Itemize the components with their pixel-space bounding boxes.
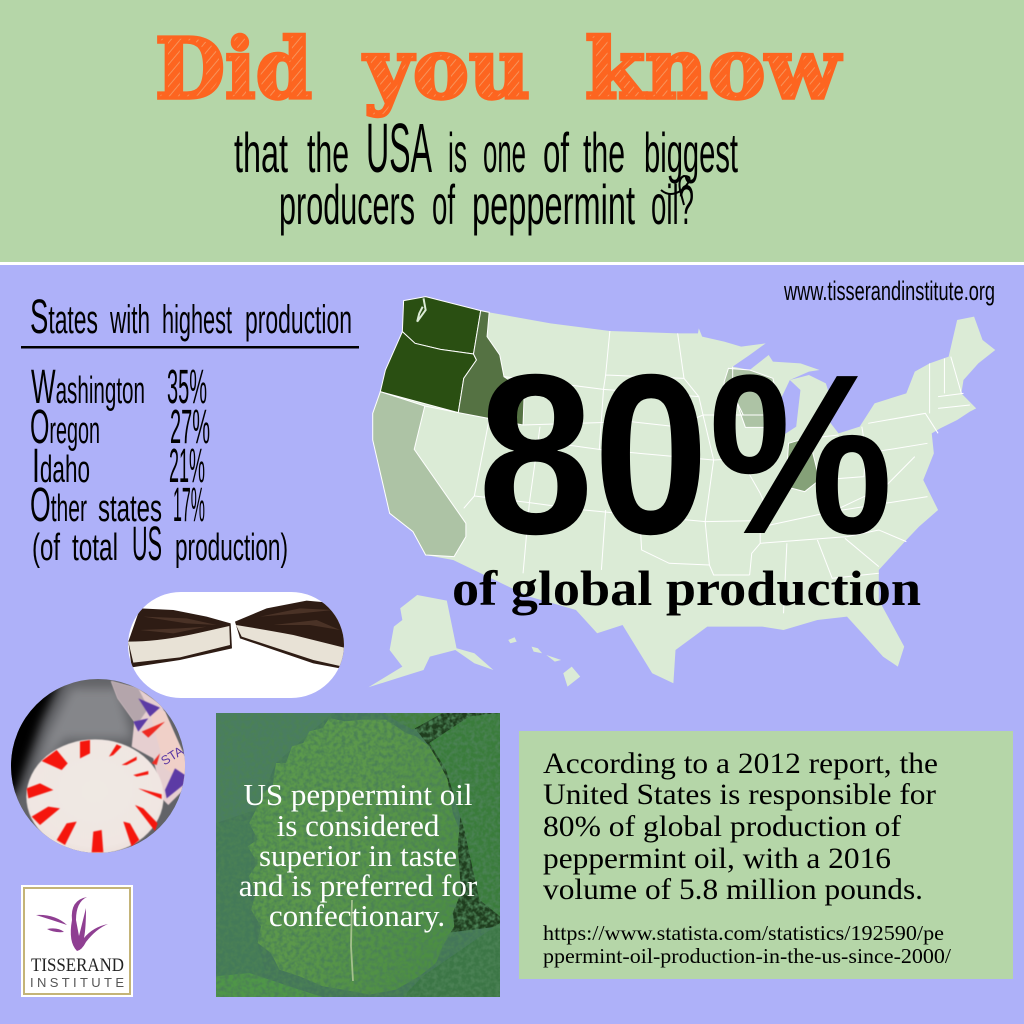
subtitle: that <box>234 121 288 184</box>
wrapper print: STA <box>158 743 186 768</box>
candy wrapper <box>111 681 188 805</box>
subtitle: the <box>307 121 349 184</box>
state production list: 27% <box>170 401 210 454</box>
states heading: with <box>109 298 150 342</box>
header divider <box>0 262 1024 265</box>
subtitle: USA <box>366 109 432 187</box>
panel: report fact <box>519 731 1013 979</box>
state: california <box>373 392 466 557</box>
big stat caption: of global production <box>452 560 921 616</box>
state production list: 17% <box>173 479 205 532</box>
report text: peppermint oil, with a 2016 <box>543 842 891 875</box>
title: Did <box>155 20 312 118</box>
title <box>155 20 843 118</box>
state production list <box>30 361 288 571</box>
big stat: 80%: 80% <box>478 328 893 582</box>
subtitle: of <box>543 121 569 184</box>
subtitle: one <box>483 121 526 184</box>
photo: striped mint candy <box>11 679 185 853</box>
source url <box>543 921 951 968</box>
logo: Tisserand Institute <box>21 885 133 997</box>
state production list: (of <box>32 527 60 569</box>
state borders <box>425 331 970 613</box>
map of the USA <box>368 297 995 687</box>
state: idaho <box>458 311 524 425</box>
leaf caption <box>239 777 478 933</box>
mint <box>26 739 164 854</box>
state production list: US <box>132 518 162 571</box>
subtitle: biggest <box>644 121 738 184</box>
subtitle: producers <box>279 173 415 236</box>
report text <box>543 747 938 906</box>
state production list: Idaho <box>32 440 90 493</box>
alaska <box>368 595 493 687</box>
state production list: Other <box>30 479 87 532</box>
leaf caption: and is preferred for <box>239 868 478 903</box>
title: you <box>362 20 530 118</box>
report text: United States is responsible for <box>543 778 936 811</box>
smoky background <box>35 688 132 775</box>
leaf texture <box>216 713 500 997</box>
lake michigan <box>777 380 800 435</box>
contiguous states land <box>373 297 995 683</box>
subtitle: of <box>432 173 455 236</box>
state: washington <box>402 297 481 354</box>
leaf caption: is considered <box>277 808 440 843</box>
logo text: TISSERAND <box>31 955 124 976</box>
header panel <box>0 0 1024 262</box>
leaf caption: superior in taste <box>259 838 457 873</box>
state production list: total <box>72 527 118 569</box>
subtitle <box>234 109 738 236</box>
leaf caption: US peppermint oil <box>243 777 473 812</box>
hawaii <box>508 637 580 687</box>
puget sound <box>417 298 426 322</box>
state production list: states <box>98 488 162 530</box>
subtitle: peppermint <box>472 173 635 236</box>
state: indiana <box>786 437 819 492</box>
subtitle: is <box>448 121 467 184</box>
state production list: Washington <box>31 361 145 414</box>
logo: Tisserand Institute: INSTITUTE <box>30 975 124 990</box>
red stripes <box>27 740 162 852</box>
state production list: Oregon <box>30 401 100 454</box>
photo: peppermint patty <box>128 592 347 698</box>
states heading: highest <box>162 298 232 342</box>
state production list: 21% <box>169 440 205 493</box>
left half <box>128 608 232 667</box>
states heading: production <box>245 298 352 342</box>
midrib <box>351 900 353 981</box>
body panel <box>0 265 1024 1024</box>
states heading <box>30 291 352 344</box>
background leaves <box>216 713 333 823</box>
report text: According to a 2012 report, the <box>543 747 938 780</box>
photo: mint leaf with caption <box>216 713 500 997</box>
source url: ppermint-oil-production-in-the-us-since-2000/ <box>543 944 951 968</box>
subtitle: the <box>583 121 625 184</box>
title: know <box>585 20 843 118</box>
states heading: States <box>30 291 98 344</box>
heading underline <box>21 346 359 348</box>
report text: 80% of global production of <box>543 810 901 843</box>
subtitle: oil? <box>651 173 694 236</box>
source url: https://www.statista.com/statistics/192590/pe <box>543 921 944 945</box>
state: oregon <box>380 332 476 413</box>
right half <box>235 601 347 668</box>
state production list: production) <box>175 527 288 569</box>
report text: volume of 5.8 million pounds. <box>543 873 923 906</box>
central leaf <box>248 718 461 995</box>
state: wisconsin <box>724 368 784 427</box>
leaf caption: confectionary. <box>269 898 445 933</box>
state production list: 35% <box>167 361 207 414</box>
logo mark <box>36 897 108 951</box>
